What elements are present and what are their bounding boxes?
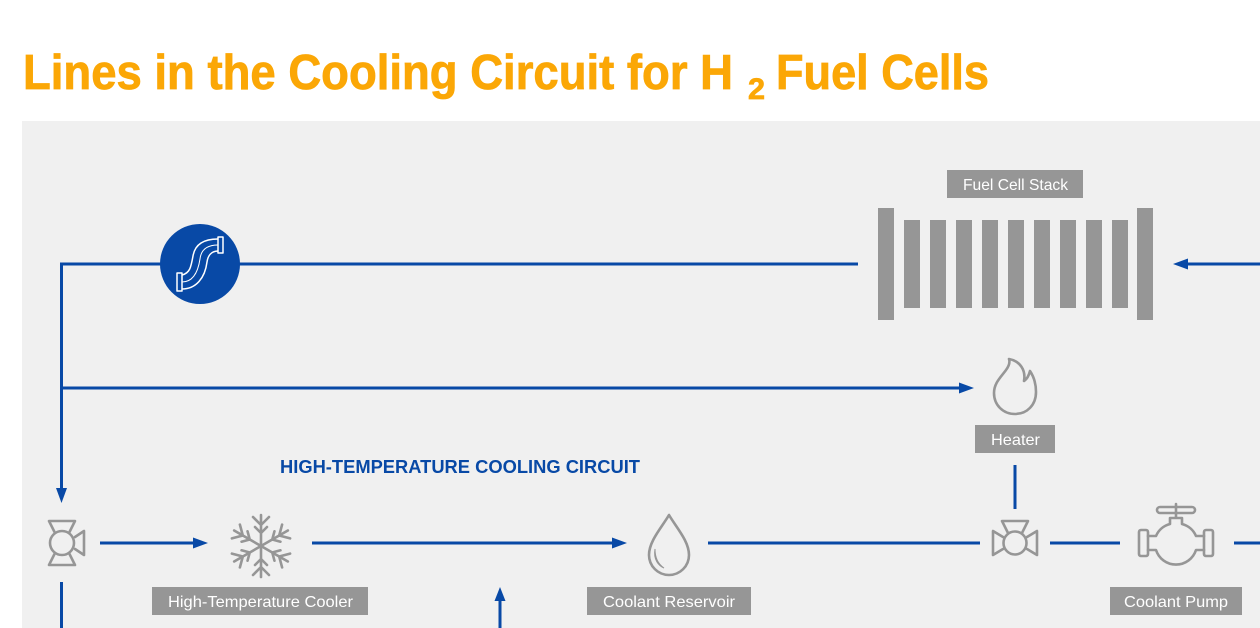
coolant line: pump outlet <box>1234 542 1260 544</box>
coolant line: heater to three-way valve <box>1014 465 1016 509</box>
coolant line: valve to cooler arrow <box>100 538 208 548</box>
coolant line: reservoir to three-way valve <box>708 542 980 544</box>
icon: snowflake cooler <box>230 515 292 577</box>
title: Lines in the Cooling Circuit for H <box>23 46 733 100</box>
label: Heater: Heater <box>991 432 1041 449</box>
label: High-Temperature Cooler: High-Temperature Cooler <box>168 594 354 611</box>
coolant line: top return with left drop and arrow into valve <box>56 264 858 503</box>
icon: fuel cell stack <box>878 208 1153 320</box>
heading: circuit name: HIGH-TEMPERATURE COOLING CIRCUIT <box>280 457 640 477</box>
coolant line: cooler to reservoir arrow <box>312 538 627 548</box>
label: Coolant Pump <box>1110 587 1242 615</box>
coolant line: arrow into fuel cell stack <box>1173 258 1260 270</box>
icon: heater flame <box>994 359 1036 414</box>
coolant line: left valve down <box>60 582 63 628</box>
icon: coolant reservoir drop <box>649 515 689 575</box>
panel: diagram background <box>22 121 1260 628</box>
label: High-Temperature Cooler <box>152 587 368 615</box>
label: Coolant Reservoir: Coolant Reservoir <box>603 594 736 611</box>
icon: right three-way valve <box>993 521 1037 555</box>
label: Fuel Cell Stack: Fuel Cell Stack <box>963 177 1069 194</box>
label: Heater <box>975 425 1055 453</box>
label: Fuel Cell Stack <box>947 170 1083 198</box>
title: Fuel Cells <box>776 46 989 100</box>
coolant line: upward arrow into reservoir line <box>494 587 506 628</box>
label: Coolant Reservoir <box>587 587 751 615</box>
icon: left three-way valve <box>49 521 84 565</box>
icon: blue pipe badge <box>160 224 240 304</box>
title: 2 <box>748 73 765 106</box>
coolant line: three-way valve to pump <box>1050 542 1120 544</box>
icon: coolant pump <box>1139 504 1213 565</box>
label: Coolant Pump: Coolant Pump <box>1124 594 1228 611</box>
coolant line: branch to heater with arrow <box>62 382 974 394</box>
